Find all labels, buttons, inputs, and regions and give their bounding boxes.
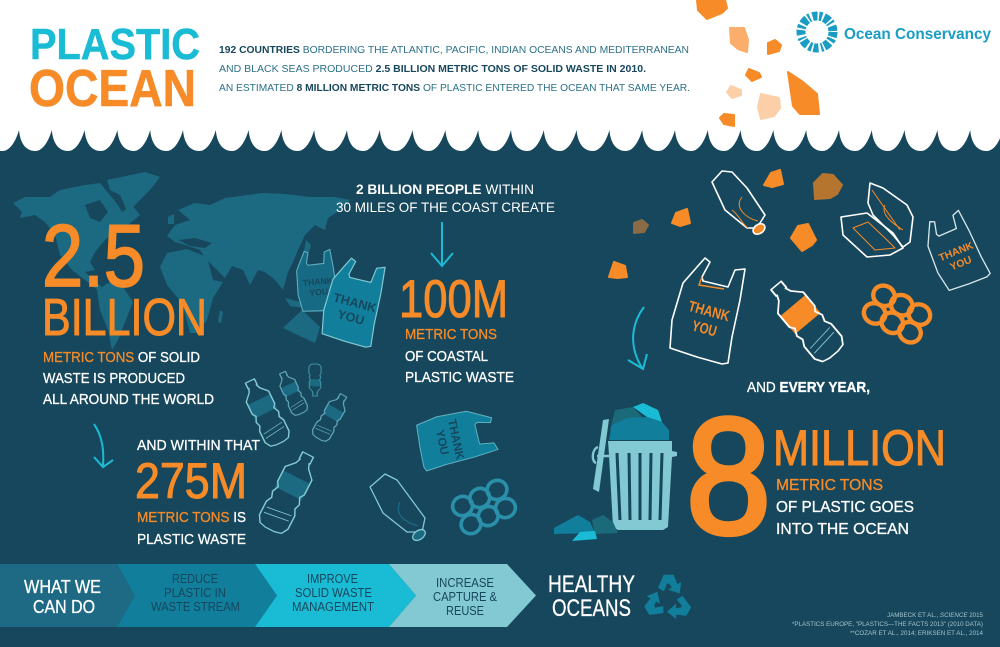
icon: crushed bottle white <box>712 171 767 236</box>
stat: 100M <box>399 270 514 386</box>
chevron: reduce: REDUCE <box>172 571 218 586</box>
icon: crushed bottle teal <box>370 474 427 543</box>
chevron: what we can do <box>0 564 135 627</box>
chevron: increase: REUSE <box>446 603 484 618</box>
stat: 8 million: 8 <box>686 384 771 568</box>
icon: teal bag lower: YOU <box>433 429 451 456</box>
icon: trash can <box>554 403 677 541</box>
stat: 2.5 billion: ALL AROUND THE WORLD <box>43 391 214 408</box>
stat: 8 million: INTO THE OCEAN <box>776 521 909 538</box>
text: 2 billion people: 2 BILLION PEOPLE WITHIN <box>356 181 534 197</box>
icon: front teal bag: YOU <box>336 307 366 328</box>
icon: six-pack rings orange <box>860 282 934 346</box>
title: OCEAN <box>29 60 196 118</box>
icon: teal bag lower <box>405 393 506 483</box>
arrow: to trash can <box>628 307 647 369</box>
intro text: AN ESTIMATED 8 MILLION METRIC TONS OF PLASTIC ENTERED THE OCEAN THAT SAME YEAR. <box>219 83 690 94</box>
icon: front teal bag <box>322 258 385 347</box>
icon: teal bag lower: THANK <box>445 418 466 461</box>
stat: 275M: METRIC TONS IS <box>137 509 246 526</box>
stat: 8 million: OF PLASTIC GOES <box>776 499 914 516</box>
stat: 100M: 100M <box>399 270 508 329</box>
stat: 275M <box>135 437 260 548</box>
stat: 2.5 billion: METRIC TONS OF SOLID <box>43 349 200 366</box>
stat: 275M: 275M <box>135 453 247 509</box>
icon: large white bottle <box>763 274 847 366</box>
icon: back teal bag: THANK <box>302 275 334 288</box>
icon: large white bag <box>670 258 745 364</box>
chevron: what we can do: CAN DO <box>33 597 95 617</box>
stat: 8 million <box>686 379 946 568</box>
arrow: to 275M <box>94 424 113 467</box>
icon: small white bag <box>909 204 1000 300</box>
stat: 100M: METRIC TONS <box>405 326 497 343</box>
icon: six-pack rings teal <box>449 477 519 537</box>
floating plastic pieces ocean <box>609 170 842 278</box>
stat: 275M: PLASTIC WASTE <box>137 531 246 548</box>
text: sources <box>792 613 984 637</box>
stat: 2.5 billion <box>42 206 214 408</box>
chevron: increase: CAPTURE & <box>433 589 497 604</box>
chevron: reduce: WASTE STREAM <box>151 599 240 614</box>
stat: 100M: PLASTIC WASTE <box>405 369 514 386</box>
icon: clamshell container <box>841 183 913 257</box>
chevron: improve: IMPROVE <box>307 571 358 586</box>
icon: group of bottles <box>238 364 352 537</box>
title <box>29 20 200 118</box>
chevron: increase: INCREASE <box>436 575 494 590</box>
chevron: reduce <box>117 564 277 627</box>
intro text: 192 COUNTRIES BORDERING THE ATLANTIC, PACIFIC, INDIAN OCEANS AND MEDITERRANEAN <box>219 45 689 56</box>
logo: Ocean Conservancy <box>801 16 991 48</box>
text: healthy oceans <box>548 571 635 622</box>
arrow: to 100M <box>431 222 453 266</box>
stat: 100M: OF COASTAL <box>405 348 488 365</box>
text: healthy oceans: HEALTHY <box>548 571 635 598</box>
icon: recycle <box>640 575 694 623</box>
icon: large white bag: THANK <box>686 298 732 325</box>
chevron: increase <box>389 564 536 627</box>
text: healthy oceans: OCEANS <box>552 595 631 622</box>
stat: 275M: AND WITHIN THAT <box>137 437 260 454</box>
ocean background with waves <box>0 130 1000 647</box>
stat: 2.5 billion: BILLION <box>42 289 207 347</box>
intro text: AND BLACK SEAS PRODUCED 2.5 BILLION METRIC TONS OF SOLID WASTE IN 2010. <box>219 64 646 75</box>
stat: 8 million: AND EVERY YEAR, <box>747 379 870 396</box>
text: sources: *PLASTICS EUROPE, "PLASTICS—THE FACTS 2013" (2010 DATA) <box>792 622 983 628</box>
floating plastic pieces header <box>697 0 819 126</box>
icon: large white bag: YOU <box>690 318 719 340</box>
title: PLASTIC <box>30 20 200 69</box>
logo: Ocean Conservancy: Ocean Conservancy <box>844 26 991 43</box>
intro text <box>219 45 690 94</box>
stat: 2.5 billion: WASTE IS PRODUCED <box>43 370 185 387</box>
icon: front teal bag: THANK <box>332 290 378 315</box>
chevron: improve: SOLID WASTE <box>295 585 372 600</box>
world map <box>13 172 350 350</box>
chevron: improve <box>255 564 416 627</box>
stat: 8 million: MILLION <box>773 420 946 476</box>
text: sources: **COZAR ET AL., 2014; ERIKSEN ET AL., 2014 <box>850 631 984 637</box>
stat: 2.5 billion: 2.5 <box>42 206 145 305</box>
text: 2 billion people <box>336 181 555 215</box>
chevron: reduce: PLASTIC IN <box>164 585 226 600</box>
chevron: what we can do: WHAT WE <box>24 577 101 597</box>
text: 2 billion people: 30 MILES OF THE COAST CREATE <box>336 199 555 215</box>
text: sources: JAMBECK ET AL., SCIENCE 2015 <box>887 613 984 619</box>
stat: 8 million: METRIC TONS <box>776 477 883 494</box>
icon: back teal bag: YOU <box>309 286 329 298</box>
icon: small white bag: THANK <box>937 240 976 264</box>
icon: back teal bag <box>284 243 350 321</box>
chevron: improve: MANAGEMENT <box>292 599 374 614</box>
icon: small white bag: YOU <box>949 255 974 273</box>
